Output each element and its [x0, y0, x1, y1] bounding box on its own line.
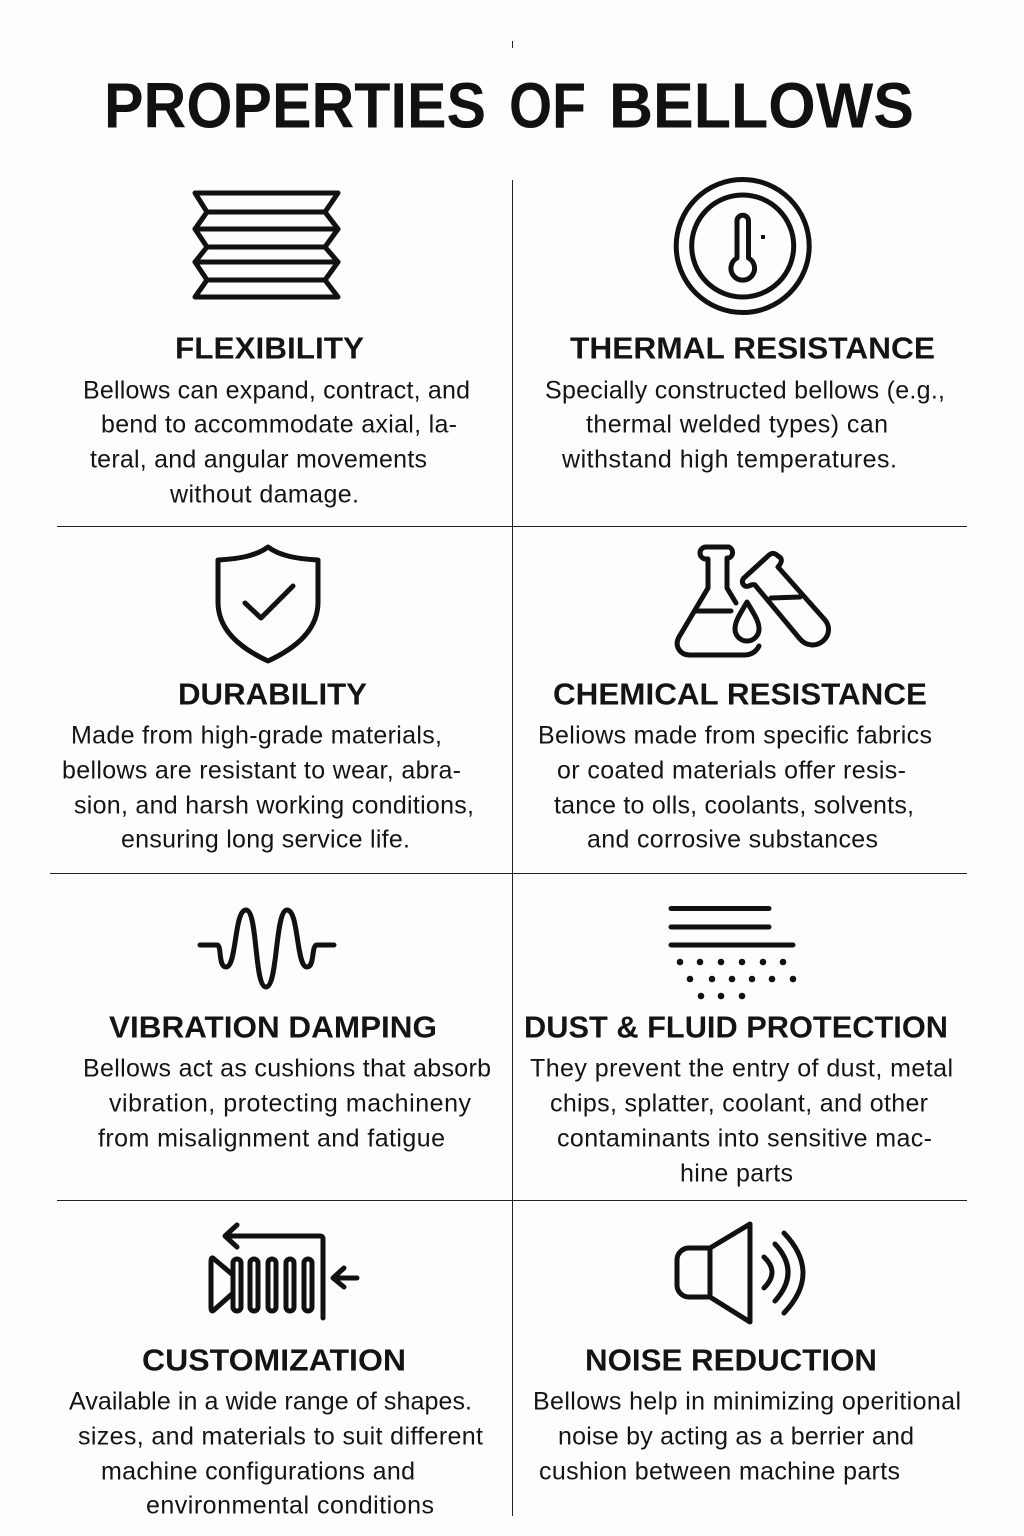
panel: vibration damping [83, 910, 491, 1152]
text: customization description: machine configurations and [101, 1458, 415, 1486]
text: customization description: Available in a wide range of shapes. [69, 1388, 472, 1416]
text: dust description: They prevent the entry of dust, metal [530, 1054, 953, 1082]
icon: thermometer in circle [676, 180, 809, 312]
text: vibration description: vibration, protecting machineny [109, 1090, 472, 1118]
title: PROPERTIES [104, 70, 486, 142]
text: chemical description: tance to olls, coolants, solvents, [554, 792, 914, 820]
text: flexibility description [83, 376, 470, 508]
icon: bellows [195, 193, 338, 297]
icon: speaker with sound waves [677, 1224, 803, 1322]
text: flexibility description: bend to accommodate axial, la- [101, 410, 457, 438]
text: vibration description [83, 1054, 491, 1152]
panel: customization [69, 1225, 483, 1520]
text: durability description: sion, and harsh working conditions, [74, 792, 474, 820]
title: BELLOWS [609, 70, 914, 142]
text: thermal description: thermal welded types) can [586, 410, 888, 438]
panel: flexibility [83, 193, 470, 508]
text: dust description [530, 1054, 953, 1188]
text: customization description: environmental conditions [146, 1492, 434, 1520]
title [104, 70, 914, 142]
text: noise description: cushion between machine parts [539, 1458, 900, 1486]
text: thermal description [545, 376, 945, 474]
text: flexibility description: Bellows can expand, contract, and [83, 376, 470, 404]
icon: flask, drop and test tube [677, 547, 829, 655]
text: durability description [62, 722, 474, 854]
text: flexibility description: without damage. [169, 480, 359, 508]
text: noise description [533, 1388, 961, 1486]
text: chemical description: and corrosive substances [587, 826, 878, 854]
heading: noise reduction: NOISE REDUCTION [585, 1344, 877, 1378]
heading: chemical resistance: CHEMICAL RESISTANCE [553, 678, 927, 712]
text: durability description: ensuring long service life. [121, 826, 410, 854]
panel: thermal resistance [545, 180, 945, 474]
text: noise description: noise by acting as a berrier and [558, 1422, 914, 1450]
text: chemical description [538, 722, 932, 854]
panel: noise reduction [533, 1224, 961, 1486]
panel: durability [62, 547, 474, 854]
icon: vibration wave [200, 910, 334, 987]
text: dust description: chips, splatter, coolant, and other [550, 1090, 928, 1118]
text: dust description: hine parts [680, 1160, 793, 1188]
icon: barrier lines and dust dots [671, 908, 796, 999]
text: chemical description: Beliows made from specific fabrics [538, 722, 932, 750]
text: vibration description: Bellows act as cushions that absorb [83, 1054, 491, 1082]
text: dust description: contaminants into sensitive mac- [557, 1124, 932, 1152]
text: chemical description: or coated materials offer resis- [557, 756, 906, 784]
heading: thermal resistance: THERMAL RESISTANCE [570, 332, 935, 366]
heading: vibration damping: VIBRATION DAMPING [109, 1010, 437, 1044]
text: noise description: Bellows help in minimizing operitional [533, 1388, 961, 1416]
heading: dust and fluid protection: DUST & FLUID PROTECTION [524, 1010, 948, 1044]
text: vibration description: from misalignment and fatigue [98, 1124, 445, 1152]
text: thermal description: Specially constructed bellows (e.g., [545, 376, 945, 404]
heading: durability: DURABILITY [178, 678, 367, 712]
title: OF [509, 70, 586, 142]
panel: chemical resistance [538, 547, 932, 854]
icon: bellows with arrows [211, 1225, 357, 1318]
text: customization description: sizes, and materials to suit different [78, 1422, 483, 1450]
heading: customization: CUSTOMIZATION [142, 1344, 406, 1378]
text: customization description [69, 1388, 483, 1520]
heading: flexibility: FLEXIBILITY [175, 332, 364, 366]
text: thermal description: withstand high temperatures. [561, 446, 897, 474]
text: durability description: Made from high-grade materials, [71, 722, 442, 750]
text: flexibility description: teral, and angular movements [90, 446, 427, 474]
panel: dust and fluid protection [524, 908, 953, 1188]
text: durability description: bellows are resistant to wear, abra- [62, 756, 461, 784]
icon: shield with check [218, 547, 318, 661]
